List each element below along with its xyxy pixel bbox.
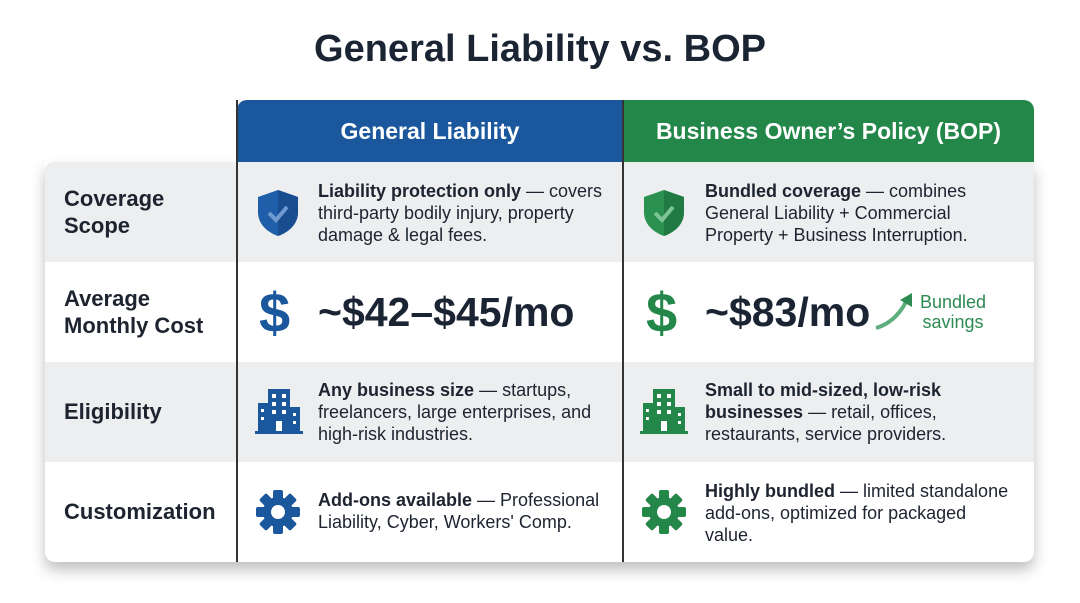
- text: BOP coverage: [705, 181, 968, 245]
- header: general liability: General Liability: [341, 118, 519, 144]
- row label: average monthly cost: [64, 286, 204, 338]
- row label: customization: Customization: [64, 499, 216, 524]
- icon: blue building: [255, 389, 303, 434]
- arrow: savings: [876, 293, 912, 330]
- text: BOP eligibility: restaurants, service providers.: [705, 424, 946, 444]
- header: BOP: Business Owner’s Policy (BOP): [656, 118, 1001, 144]
- text: BOP customization: value.: [705, 525, 753, 545]
- text: GL customization: Add-ons available — Professional: [318, 490, 599, 510]
- text: bundled savings: Bundled: [920, 292, 986, 312]
- row label: average monthly cost: Average: [64, 286, 150, 311]
- text: GL eligibility: Any business size — startups,: [318, 380, 571, 400]
- text: GL coverage: third-party bodily injury, property: [318, 203, 574, 223]
- row label: coverage scope: [64, 186, 164, 238]
- text: GL eligibility: [318, 380, 591, 444]
- text: BOP eligibility: Small to mid-sized, low-risk: [705, 380, 941, 400]
- row backgrounds: [45, 162, 1034, 262]
- text: bundled savings: savings: [923, 312, 984, 332]
- header: BOP: [623, 100, 1034, 162]
- row label: average monthly cost: Monthly Cost: [64, 313, 203, 338]
- text: GL eligibility: high-risk industries.: [318, 424, 473, 444]
- text: BOP coverage: Bundled coverage — combines: [705, 181, 966, 201]
- text: GL coverage: Liability protection only — covers: [318, 181, 602, 201]
- price: BOP: ~$83/mo: [705, 289, 870, 335]
- column dividers: [236, 100, 238, 562]
- text: GL coverage: [318, 181, 602, 245]
- title: General Liability vs. BOP: [314, 28, 766, 70]
- table shadow: [45, 162, 1034, 562]
- icon: green dollar: $: [646, 281, 677, 344]
- text: BOP customization: [705, 481, 1008, 545]
- icon: green gear: [642, 490, 686, 534]
- text: BOP coverage: General Liability + Commercial: [705, 203, 951, 223]
- text: BOP customization: Highly bundled — limited standalone: [705, 481, 1008, 501]
- price: GL: ~$42–$45/mo: [318, 289, 574, 335]
- row label: eligibility: Eligibility: [64, 399, 162, 424]
- text: GL eligibility: freelancers, large enterprises, and: [318, 402, 591, 422]
- text: GL customization: [318, 490, 599, 532]
- row label: coverage scope: Coverage: [64, 186, 164, 211]
- icon: green building: [640, 389, 688, 434]
- text: GL customization: Liability, Cyber, Workers' Comp.: [318, 512, 572, 532]
- text: BOP customization: add-ons, optimized for packaged: [705, 503, 966, 523]
- text: BOP eligibility: [705, 380, 946, 444]
- text: BOP eligibility: businesses — retail, offices,: [705, 402, 937, 422]
- icon: blue shield: [258, 190, 298, 236]
- icon: blue dollar: $: [259, 281, 290, 344]
- text: BOP coverage: Property + Business Interruption.: [705, 225, 968, 245]
- text: GL coverage: damage & legal fees.: [318, 225, 487, 245]
- icon: blue gear: [256, 490, 300, 534]
- text: bundled savings: [920, 292, 986, 332]
- row label: coverage scope: Scope: [64, 213, 130, 238]
- icon: green shield: [644, 190, 684, 236]
- header: general liability: [237, 100, 623, 162]
